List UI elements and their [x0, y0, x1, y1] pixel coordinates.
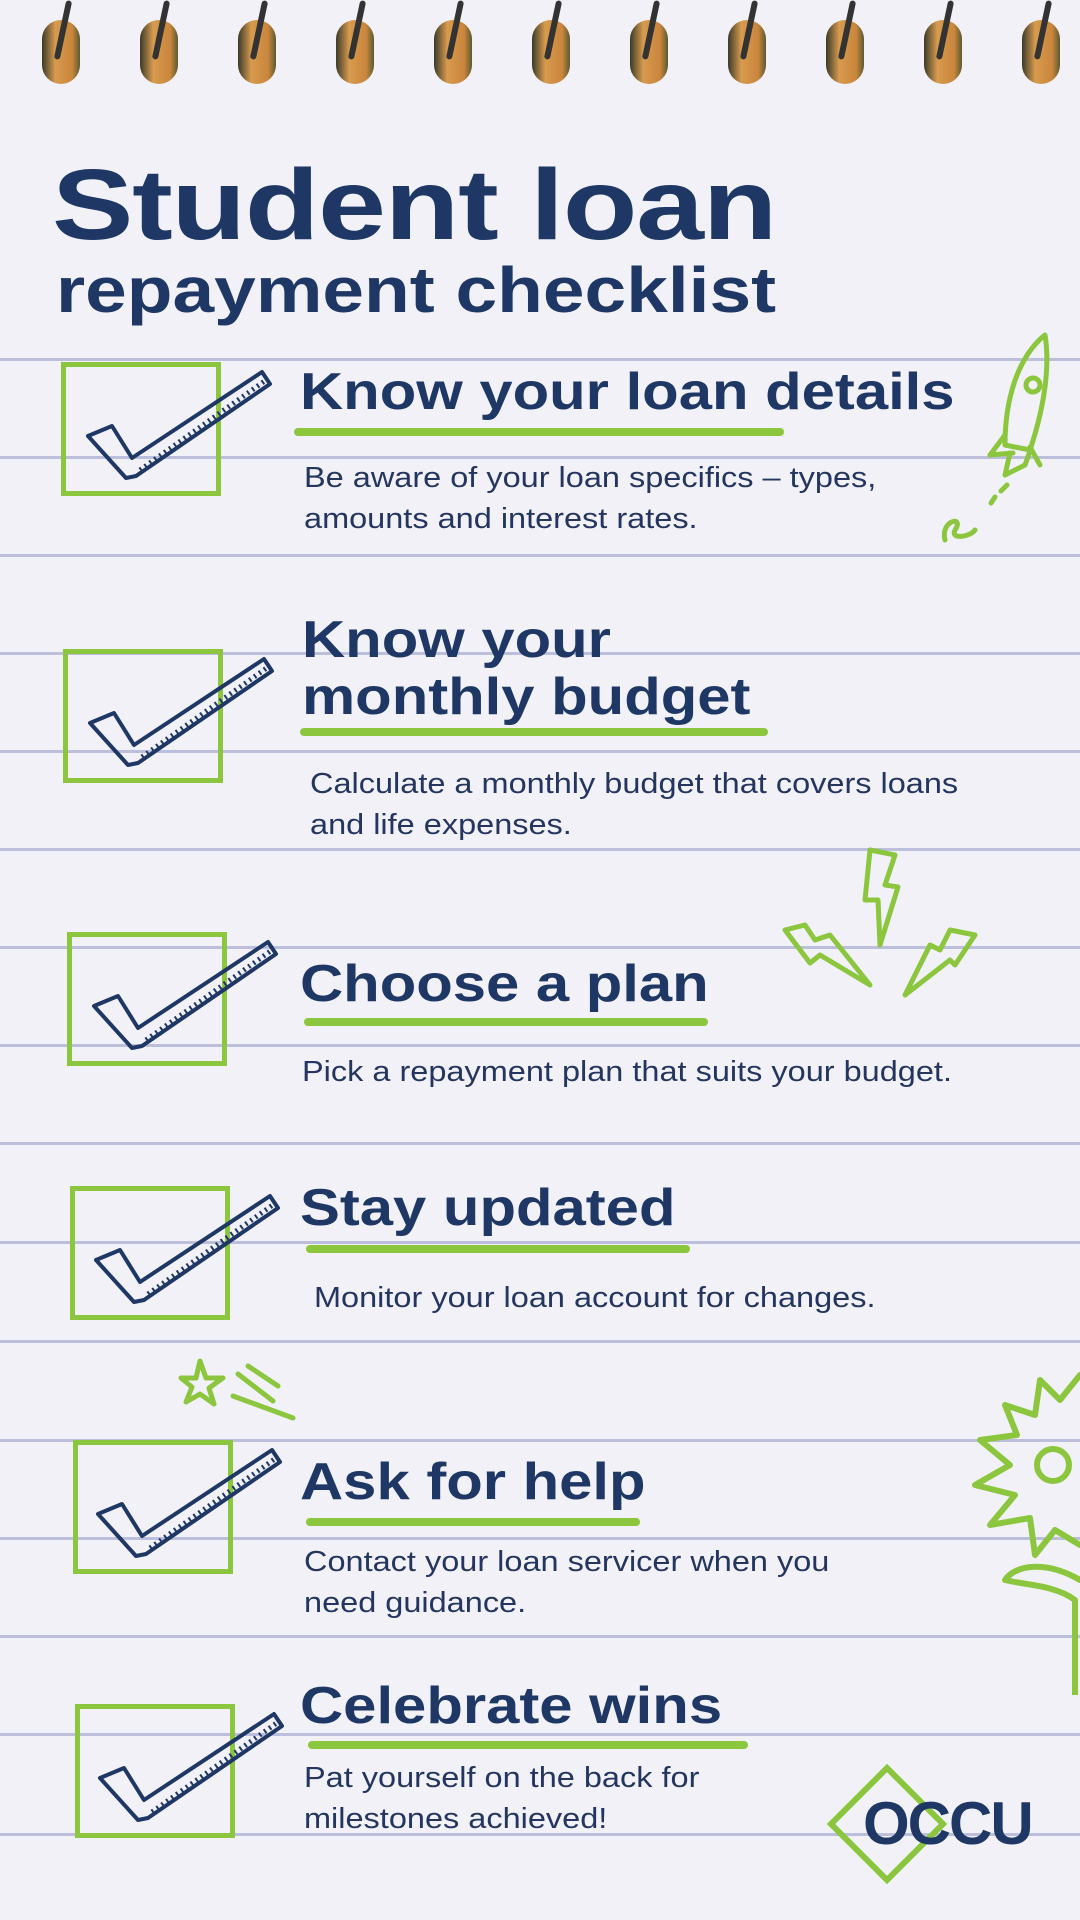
logo: OCCU: OCCU [863, 1790, 1032, 1857]
heading: Choose a plan [300, 955, 709, 1013]
heading: Ask for help [300, 1453, 646, 1511]
description: Monitor your loan account for changes. [314, 1282, 876, 1314]
description: Pat yourself on the back for [304, 1762, 699, 1794]
icon: lightning bolts [782, 848, 978, 998]
icon: star doodle [178, 1358, 296, 1420]
description: Be aware of your loan specifics – types, [304, 462, 876, 494]
description: Calculate a monthly budget that covers loans [310, 768, 958, 800]
icon: checkmark [98, 1712, 284, 1822]
checkbox [63, 649, 223, 783]
icon: rocket doodle [942, 332, 1050, 542]
description [304, 1762, 699, 1835]
description: Contact your loan servicer when you [304, 1546, 829, 1578]
description: need guidance. [304, 1587, 526, 1619]
item 4: stay updated [70, 1179, 876, 1320]
icon: checkmark [86, 370, 272, 480]
description [304, 1546, 829, 1619]
description: and life expenses. [310, 809, 572, 841]
icon: checkmark [92, 940, 278, 1050]
description [310, 768, 958, 841]
checkbox [75, 1704, 235, 1838]
title: Student loan [52, 149, 776, 261]
heading [302, 611, 750, 726]
binding rings [42, 0, 1060, 84]
item 6: celebrate wins [75, 1677, 748, 1838]
heading: Know your [302, 611, 611, 669]
icon: checkmark [96, 1448, 282, 1558]
checkbox [67, 932, 227, 1066]
checkbox [61, 362, 221, 496]
icon: checkmark [88, 656, 274, 767]
heading: monthly budget [302, 668, 750, 726]
title: repayment checklist [56, 254, 776, 326]
item 3: choose a plan [67, 932, 952, 1088]
checkbox [73, 1440, 233, 1574]
heading: Stay updated [300, 1179, 675, 1237]
item 1: know your loan details [61, 362, 955, 535]
item 2: monthly budget [63, 611, 958, 841]
icon: flower doodle [972, 1372, 1080, 1695]
heading: Know your loan details [300, 363, 955, 421]
logo: OCCU [826, 1764, 1032, 1884]
description: milestones achieved! [304, 1803, 607, 1835]
description: Pick a repayment plan that suits your budget. [302, 1056, 952, 1088]
checkbox [70, 1186, 230, 1320]
description [304, 462, 876, 535]
description: amounts and interest rates. [304, 503, 698, 535]
icon: checkmark [94, 1194, 280, 1304]
item 5: ask for help [73, 1440, 829, 1619]
heading: Celebrate wins [300, 1677, 722, 1735]
title [52, 149, 776, 326]
